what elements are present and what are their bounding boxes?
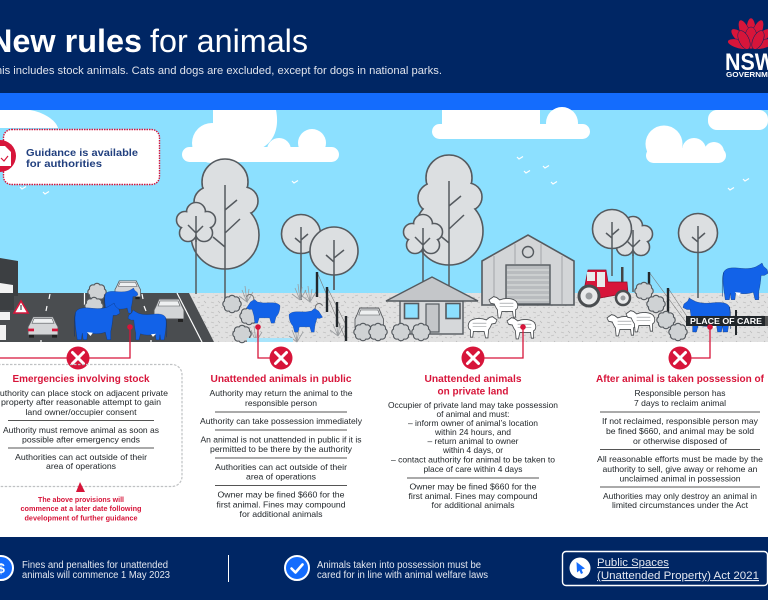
body text: [0, 388, 168, 471]
icon: cross 3: [462, 346, 484, 370]
body text: – contact authority for animal to be taken to: [391, 454, 555, 464]
heading: After animal is taken possession of: [596, 373, 764, 385]
body text: property after reasonable attempt to gain: [1, 397, 161, 407]
heading: Unattended animals in public: [210, 373, 352, 385]
right-hand bushes in front of car: [354, 323, 387, 341]
place of care cows and sign: PLACE OF CARE: [690, 317, 763, 326]
body text: – inform owner of animal’s location: [408, 418, 538, 428]
body text: [200, 388, 363, 519]
trees: [176, 155, 718, 303]
connectors: [0, 324, 713, 358]
icon: cross 4: [668, 346, 692, 370]
goats: [246, 295, 323, 332]
pond: [247, 338, 293, 342]
body text: land owner/occupier consent: [26, 407, 137, 417]
icon: cross 1: [66, 346, 90, 370]
body text: Authority must remove animal as soon as: [3, 425, 159, 435]
body text: Occupier of private land may take possession: [388, 400, 558, 410]
house: [386, 277, 478, 334]
red note: development of further guidance: [24, 514, 138, 522]
panel: unattended animals on private land: [388, 373, 558, 510]
heading: Emergencies involving stock: [12, 373, 150, 385]
truck: [0, 258, 18, 340]
body text: [388, 400, 558, 510]
subtitle: This includes stock animals. Cats and dogs are excluded, except for dogs in national parks.: [0, 65, 442, 77]
grass tufts: [239, 284, 344, 342]
footer note: fines: Fines and penalties for unattended: [22, 560, 168, 571]
footer note: fines: animals will commence 1 May 2023: [22, 570, 170, 581]
body text: area of operations: [46, 461, 116, 471]
heading: on private land: [438, 386, 508, 398]
body text: responsible person: [245, 398, 317, 408]
warning sign: [14, 301, 28, 313]
footer note: welfare: cared for in line with animal welfare laws: [317, 570, 488, 581]
red note: The above provisions will: [38, 495, 124, 504]
heading: Unattended animals: [424, 373, 522, 385]
body text: within 24 hours, and: [434, 427, 511, 437]
body text: within 4 days, or: [442, 445, 503, 455]
fences: [317, 272, 688, 341]
guidance callout: [0, 130, 160, 184]
link text: (Unattended Property) Act 2021: [597, 570, 759, 582]
body text: Authority can take possession immediately: [200, 416, 363, 426]
blue stripe: [0, 93, 768, 110]
body text: place of care within 4 days: [424, 464, 522, 474]
red note: commence at a later date following: [20, 504, 142, 513]
body text: Owner may be fined $660 for the: [410, 482, 537, 492]
body text: of animal and must:: [436, 409, 510, 419]
footer band: [0, 537, 768, 600]
body text: area of operations: [246, 472, 316, 482]
body text: possible after emergency ends: [22, 434, 140, 444]
body text: [597, 388, 763, 510]
body text: limited circumstances under the Act: [612, 500, 749, 510]
body text: Authorities may only destroy an animal in: [603, 491, 757, 501]
body text: first animal. Fines may compound: [408, 491, 538, 501]
bushes: [85, 282, 687, 343]
body text: authority to sell, give away or rehome an: [602, 464, 758, 474]
header band: [0, 0, 768, 93]
icon: document with tick: [0, 140, 16, 172]
shed: [482, 235, 574, 305]
cows on road: [74, 288, 167, 340]
icon: dollar: [0, 556, 13, 580]
panel: after animal is taken possession of: [596, 373, 764, 510]
title: for animals: [150, 23, 308, 59]
body text: be fined $660, and animal may be sold: [606, 426, 754, 436]
icon: tick: [285, 556, 309, 580]
triangle pointer: [76, 482, 85, 492]
icon: cursor: [570, 558, 590, 578]
body text: An animal is not unattended in public if it is: [200, 434, 362, 444]
guidance text: for authorities: [26, 158, 102, 170]
cars: [28, 281, 384, 338]
ground: [0, 293, 768, 342]
body text: permitted to be there by the authority: [210, 444, 353, 454]
body text: Authorities can act outside of their: [215, 462, 347, 472]
body text: Owner may be fined $660 for the: [218, 490, 345, 500]
road: [0, 293, 214, 342]
tractor: [579, 267, 630, 306]
sheep: [468, 297, 655, 339]
guidance text: Guidance is available: [26, 147, 138, 159]
link text: Public Spaces: [597, 557, 670, 569]
place of care cows and sign: [683, 263, 768, 335]
link box: [562, 552, 768, 586]
NSW Government logo: [725, 18, 768, 79]
body text: Responsible person has: [634, 388, 726, 398]
panel: unattended animals in public: [200, 373, 363, 519]
body text: All reasonable efforts must be made by the: [597, 454, 763, 464]
body text: first animal. Fines may compound: [216, 500, 346, 510]
panel: emergencies involving stock: [0, 364, 182, 522]
body text: for additional animals: [240, 509, 322, 519]
body text: for additional animals: [432, 500, 514, 510]
clouds: [0, 107, 768, 163]
scene: sky: [0, 110, 768, 294]
body text: unclaimed animal in possession: [620, 474, 741, 484]
icon: cross 2: [270, 346, 292, 370]
body text: – return animal to owner: [428, 436, 519, 446]
body text: Authority may return the animal to the: [210, 388, 353, 398]
body text: or otherwise disposed of: [633, 436, 728, 446]
body text: If not reclaimed, responsible person may: [602, 416, 759, 426]
body text: 7 days to reclaim animal: [634, 398, 726, 408]
birds: [20, 156, 749, 194]
body text: Authorities can act outside of their: [15, 452, 147, 462]
footer note: welfare: Animals taken into possession must be: [317, 560, 481, 571]
